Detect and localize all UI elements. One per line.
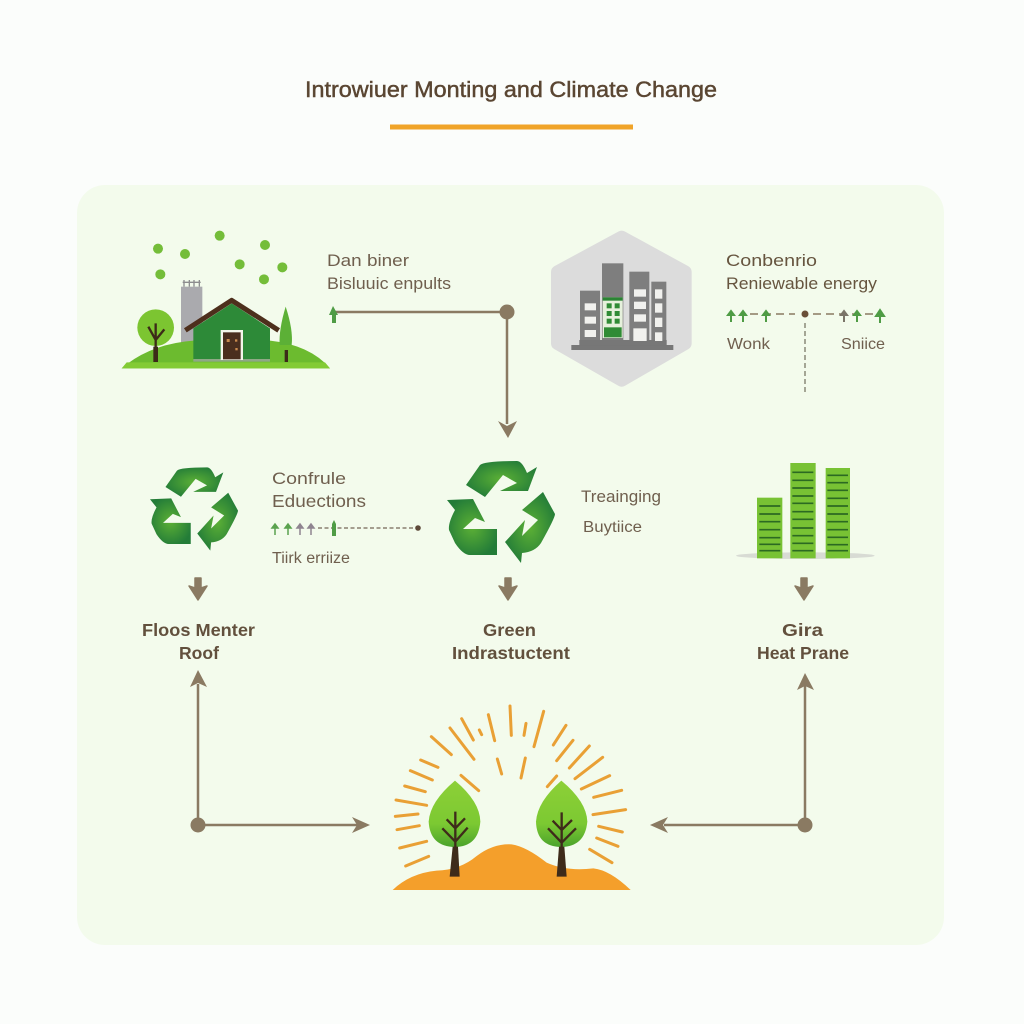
label: Buytiice: Buytiice: [583, 519, 642, 536]
heading: Green Indrastuctent: [452, 620, 570, 663]
diagram: renewable energy dashed connector: [728, 310, 884, 393]
arrow: small down right: [795, 578, 813, 600]
icon: city buildings hexagon: [558, 237, 685, 380]
heading: Green Indrastuctent: Green: [483, 620, 536, 640]
text: Dan biner block: Dan biner: [327, 251, 409, 270]
icon: green bar buildings: [736, 463, 875, 559]
text: Confrule block: Eduections: [272, 491, 366, 511]
heading: Floos Menter Roof: Roof: [179, 643, 219, 663]
text: Confrule block: Confrule: [272, 469, 346, 488]
arrow: right loop connector: [650, 673, 814, 833]
heading: Gira Heat Prane: Gira: [782, 620, 823, 640]
icon: house with trees and emissions: [122, 231, 330, 368]
heading: Gira Heat Prane: [757, 620, 849, 663]
label: Tiirk erriize: Tiirk erriize: [272, 550, 350, 567]
label: Sniice: Sniice: [841, 336, 885, 353]
panel: main background: [77, 185, 944, 945]
text: Dan biner block: [327, 251, 451, 293]
heading: Floos Menter Roof: Floos Menter: [142, 620, 255, 640]
text: Conbenrio block: [726, 251, 878, 293]
title underline: [390, 124, 633, 130]
arrow: connector from house to centre recycle: [329, 304, 517, 438]
heading: Gira Heat Prane: Heat Prane: [757, 643, 849, 663]
label: Treainging: Treainging: [581, 487, 661, 506]
heading: Green Indrastuctent: Indrastuctent: [452, 643, 570, 663]
text: Conbenrio block: Reniewable energy: [726, 275, 878, 293]
heading: Floos Menter Roof: [142, 620, 255, 663]
text: Dan biner block: Bisluuic enpults: [327, 275, 451, 293]
arrow: small down centre: [499, 578, 517, 600]
arrow: small down left: [189, 578, 207, 600]
icon: sun rays with trees on hill: [393, 706, 631, 890]
title: Introwiuer Monting and Climate Change: [305, 77, 717, 102]
icon: recycle large: [447, 461, 555, 563]
text: Conbenrio block: Conbenrio: [726, 251, 817, 270]
label: Wonk: Wonk: [727, 336, 771, 353]
icon: recycle small: [150, 467, 238, 551]
text: Confrule block: [272, 469, 366, 511]
arrow: left loop connector: [190, 670, 370, 833]
diagram: education dotted connector: [272, 520, 421, 536]
